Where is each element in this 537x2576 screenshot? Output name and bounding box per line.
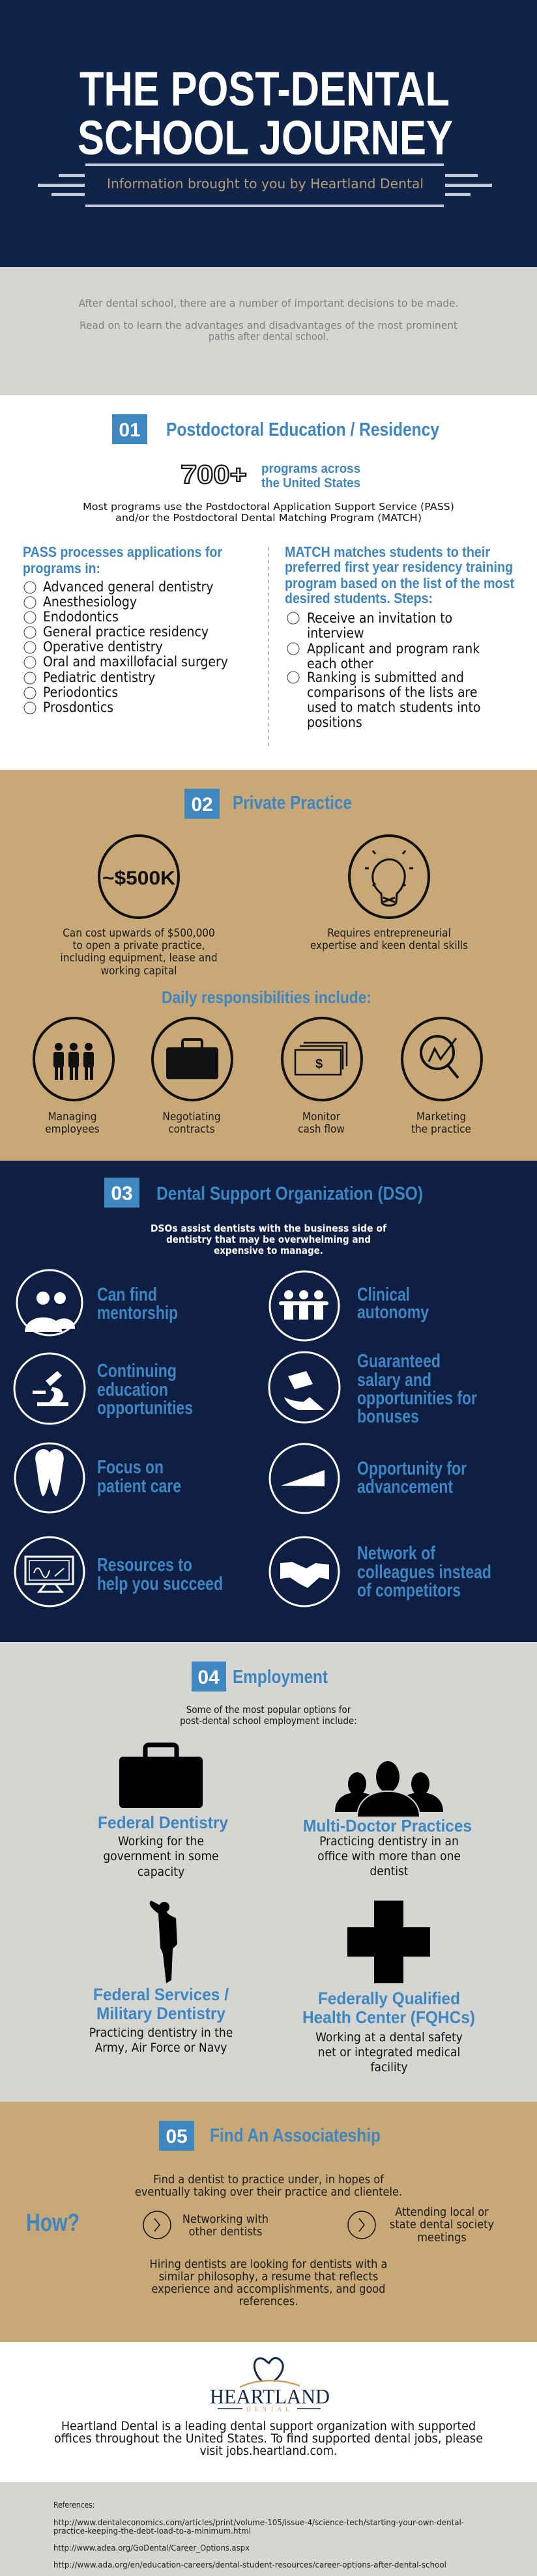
text: cost: working capital — [101, 965, 177, 978]
text: DSO benefits left: education — [97, 1380, 168, 1400]
labels: daily responsibilities: Negotiating — [162, 1111, 221, 1124]
heading 03: Dental Support Organization (DSO) — [156, 1183, 423, 1204]
icon: monitor — [25, 1557, 73, 1592]
text: DSO benefits right: Opportunity for — [357, 1458, 467, 1479]
card: federal dentistry: Working for the — [118, 1834, 204, 1848]
icon: marketing — [402, 1018, 482, 1100]
card: federal services: Federal Services / — [93, 1985, 229, 2004]
labels: daily responsibilities: contracts — [168, 1123, 215, 1136]
text: about Heartland: Heartland Dental is a leading dental support organization with supported — [61, 2419, 476, 2433]
text: DSO benefits left: Resources to — [97, 1555, 192, 1576]
item: attending meetings: Attending local or — [395, 2205, 489, 2219]
card: FQHC: Health Center (FQHCs) — [302, 2007, 475, 2027]
column: MATCH steps — [285, 544, 515, 730]
text: associateship intro: eventually taking over their practice and clientele. — [135, 2185, 402, 2199]
column: MATCH steps: positions — [307, 715, 362, 730]
heading 05: 05 — [166, 2126, 188, 2147]
column: MATCH steps: program based on the list of the most — [285, 575, 515, 591]
panel: references: practice-keeping-the-debt-load-to-a-minimum.html — [53, 2526, 251, 2536]
column: PASS list: PASS processes applications for — [23, 544, 222, 560]
icon: handshake — [280, 1562, 329, 1588]
card: federal services: Army, Air Force or Navy — [95, 2041, 227, 2055]
text: about Heartland: offices throughout the United States. To find supported dental jobs, please — [54, 2431, 483, 2446]
text: DSO benefits right: Network of — [357, 1543, 435, 1564]
card: federal services: Military Dentistry — [96, 2003, 225, 2023]
icon: soldier — [150, 1901, 177, 1983]
column: MATCH steps: desired students. Steps: — [285, 590, 433, 606]
text: about Heartland — [54, 2419, 483, 2458]
icon: cash flow: $ — [315, 1057, 323, 1071]
text: associateship intro — [135, 2173, 402, 2199]
label: How?: How? — [26, 2209, 80, 2237]
header panel — [0, 0, 537, 267]
column: MATCH steps: Receive an invitation to — [307, 610, 452, 626]
panel: 02 private practice — [0, 770, 537, 1161]
text: DSO benefits left: Focus on — [97, 1457, 164, 1478]
text: DSO intro: dentistry that may be overwhelming and — [166, 1234, 371, 1245]
column: MATCH steps: used to match students into — [307, 700, 480, 715]
stat 700+: 700+ — [181, 460, 247, 489]
text: about Heartland: visit jobs.heartland.com. — [200, 2444, 337, 2458]
icon: cash flow — [282, 1018, 362, 1100]
logo: Heartland Dental: HEARTLAND — [210, 2385, 330, 2408]
text: DSO benefits right: salary and — [357, 1370, 431, 1391]
text: DSO intro: expensive to manage. — [214, 1245, 323, 1256]
card: FQHC — [302, 1989, 475, 2074]
column: MATCH steps: preferred first year residency training — [285, 559, 513, 575]
text: DSO benefits left: Can find — [97, 1284, 157, 1305]
card: multi-doctor — [303, 1816, 472, 1878]
column: MATCH steps: Ranking is submitted and — [307, 670, 464, 685]
column: MATCH steps: each other — [307, 656, 373, 672]
icon: salary — [284, 1371, 325, 1410]
card: FQHC: facility — [371, 2060, 407, 2074]
text: employment intro — [180, 1704, 357, 1727]
icon: managing employees — [34, 1018, 113, 1100]
column: MATCH steps: MATCH matches students to their — [285, 544, 490, 560]
text: DSO benefits right — [357, 1284, 491, 1601]
panel: references: http://www.adea.org/GoDental/Career_Options.aspx — [53, 2543, 250, 2553]
intro panel: Read on to learn the advantages and disadvantages of the most prominent — [80, 319, 457, 332]
heading 02: Private Practice — [233, 793, 352, 814]
icon: briefcase — [152, 1018, 232, 1100]
panel: 01 postdoctoral education — [0, 395, 537, 770]
text: DSO benefits left — [97, 1284, 223, 1594]
text: employment intro: Some of the most popular options for — [186, 1704, 351, 1716]
column: PASS list: Periodontics — [43, 685, 118, 700]
stat 700+: programs across — [261, 462, 360, 476]
panel: references: References: — [53, 2500, 95, 2510]
intro panel: After dental school, there are a number of important decisions to be made. — [78, 297, 459, 309]
heading 05 — [159, 2121, 381, 2151]
column: PASS list: Operative dentistry — [43, 639, 163, 655]
text: cost: including equipment, lease and — [60, 952, 218, 965]
labels: daily responsibilities: employees — [45, 1123, 100, 1136]
column: MATCH steps: interview — [307, 625, 364, 641]
column: PASS list: Endodontics — [43, 609, 119, 625]
heading 04: Employment — [233, 1667, 328, 1688]
card: federal dentistry: government in some — [103, 1849, 219, 1863]
card: federal dentistry: capacity — [138, 1865, 184, 1879]
column: PASS list: Prosdontics — [43, 700, 113, 715]
title — [78, 62, 453, 165]
card: multi-doctor: Practicing dentistry in an — [319, 1834, 459, 1848]
heading: daily responsibilities: Daily responsibilities include: — [162, 987, 371, 1007]
text: DSO benefits right: of competitors — [357, 1580, 461, 1601]
icon: cross — [347, 1901, 430, 1983]
text: associateship intro: Find a dentist to practice under, in hopes of — [153, 2173, 385, 2187]
column: PASS list — [23, 544, 228, 715]
text: cost — [60, 927, 218, 978]
column: PASS list: General practice residency — [43, 624, 209, 640]
text: expertise: Requires entrepreneurial — [327, 927, 451, 940]
text: DSO benefits right: advancement — [357, 1477, 453, 1497]
panel: references: http://www.ada.org/en/education-careers/dental-student-resources/career-options-after-dental-school — [53, 2560, 446, 2569]
heading 01: Postdoctoral Education / Residency — [166, 419, 439, 440]
heading 03 — [104, 1178, 423, 1208]
logo: Heartland Dental — [210, 2358, 330, 2413]
card: multi-doctor: Multi-Doctor Practices — [303, 1816, 472, 1835]
text: cost: Can cost upwards of $500,000 — [63, 927, 215, 940]
text: hiring: similar philosophy, a resume that reflects — [159, 2270, 378, 2284]
panel: 03 DSO — [0, 1161, 537, 1642]
icon: microscope — [33, 1371, 68, 1406]
stat 700+ — [181, 460, 360, 490]
card: federal services: Practicing dentistry in the — [89, 2026, 233, 2040]
labels: daily responsibilities: Marketing — [416, 1111, 466, 1124]
heading 03: 03 — [111, 1183, 133, 1204]
heading 04: 04 — [197, 1667, 220, 1688]
panel: references — [0, 2482, 537, 2576]
text: DSO benefits left: mentorship — [97, 1303, 178, 1323]
panel: references: http://www.dentaleconomics.com/articles/print/volume-105/issue-4/science-tech/starting-your-own-dental- — [53, 2518, 464, 2527]
intro panel: paths after dental school. — [209, 330, 328, 343]
text: hiring — [150, 2258, 387, 2308]
text: DSO benefits left: help you succeed — [97, 1574, 223, 1594]
text: PASS/MATCH intro: Most programs use the Postdoctoral Application Support Service (PASS) — [83, 501, 454, 513]
text: DSO benefits right: autonomy — [357, 1302, 429, 1323]
labels: daily responsibilities — [45, 1111, 471, 1136]
text: DSO benefits left: opportunities — [97, 1398, 193, 1419]
item: attending meetings — [348, 2205, 495, 2244]
text: hiring: references. — [239, 2295, 298, 2308]
intro panel — [0, 267, 537, 395]
text: hiring: Hiring dentists are looking for dentists with a — [150, 2258, 387, 2271]
text: DSO benefits left: patient care — [97, 1476, 181, 1497]
icon: group — [335, 1761, 443, 1817]
column: PASS list: Pediatric dentistry — [43, 670, 155, 685]
text: DSO benefits right: colleagues instead — [357, 1562, 491, 1583]
text: hiring: experience and accomplishments, and good — [152, 2282, 385, 2296]
column: PASS list: Advanced general dentistry — [43, 579, 214, 595]
card: federal services — [89, 1985, 233, 2055]
card: FQHC: Federally Qualified — [318, 1989, 460, 2008]
column: MATCH steps: comparisons of the lists are — [307, 685, 477, 700]
item: networking: Networking with — [182, 2213, 268, 2226]
heading 01 — [112, 414, 439, 444]
heading 02: 02 — [191, 794, 213, 815]
column: PASS list: Oral and maxillofacial surgery — [43, 654, 228, 670]
column: PASS list: programs in: — [23, 560, 100, 576]
text: DSO benefits right: bonuses — [357, 1406, 419, 1427]
heading 01: 01 — [119, 419, 141, 441]
stat 700+: the United States — [261, 476, 360, 490]
column: MATCH steps: Applicant and program rank — [307, 641, 480, 657]
text: DSO benefits right: opportunities for — [357, 1388, 477, 1409]
text: DSO benefits left: Continuing — [97, 1361, 177, 1381]
icon: briefcase large — [119, 1745, 203, 1808]
text: employment intro: post-dental school employment include: — [180, 1715, 357, 1727]
labels: daily responsibilities: the practice — [411, 1123, 471, 1136]
card: FQHC: net or integrated medical — [318, 2045, 460, 2059]
icon: mentorship — [25, 1292, 75, 1332]
card: federal dentistry — [98, 1813, 229, 1879]
text: cost: to open a private practice, — [72, 939, 205, 952]
text: PASS/MATCH intro: and/or the Postdoctoral Dental Matching Program (MATCH) — [115, 512, 422, 524]
column: PASS list: Anesthesiology — [43, 594, 137, 610]
icon: advancement — [281, 1470, 325, 1486]
text: DSO intro: DSOs assist dentists with the business side of — [151, 1223, 386, 1234]
icon: light bulb — [349, 836, 429, 918]
heading 05: Find An Associateship — [210, 2125, 381, 2146]
text: DSO benefits right: Clinical — [357, 1284, 410, 1305]
heading 04 — [192, 1662, 328, 1691]
item: networking: other dentists — [189, 2225, 262, 2239]
icon: tooth — [35, 1449, 64, 1496]
card: multi-doctor: dentist — [370, 1864, 409, 1878]
panel: 05 associateship — [0, 2102, 537, 2342]
icon: autonomy — [279, 1290, 328, 1320]
panel: 04 employment — [0, 1642, 537, 2102]
title: SCHOOL JOURNEY — [78, 111, 453, 165]
icon: $500K — [99, 836, 179, 918]
icon: $500K: ~$500K — [102, 868, 175, 889]
item: attending meetings: state dental society — [390, 2218, 495, 2231]
title: THE POST-DENTAL — [80, 62, 450, 116]
item: attending meetings: meetings — [417, 2231, 467, 2244]
card: FQHC: Working at a dental safety — [315, 2030, 463, 2045]
text: DSO benefits right: Guaranteed — [357, 1351, 441, 1372]
card: multi-doctor: office with more than one — [317, 1849, 461, 1863]
heading 02 — [184, 789, 352, 819]
labels: daily responsibilities: Managing — [48, 1111, 97, 1124]
labels: daily responsibilities: Monitor — [302, 1111, 341, 1124]
card: federal dentistry: Federal Dentistry — [98, 1813, 229, 1832]
text: PASS/MATCH intro — [83, 501, 454, 524]
logo: Heartland Dental: DENTAL — [246, 2406, 293, 2413]
labels: daily responsibilities: cash flow — [298, 1123, 345, 1136]
text: expertise — [310, 927, 468, 952]
item: networking — [143, 2211, 268, 2239]
subtitle: Information brought to you by Heartland Dental — [107, 176, 424, 191]
text: DSO intro — [151, 1223, 386, 1256]
text: expertise: expertise and keen dental skills — [310, 939, 468, 952]
